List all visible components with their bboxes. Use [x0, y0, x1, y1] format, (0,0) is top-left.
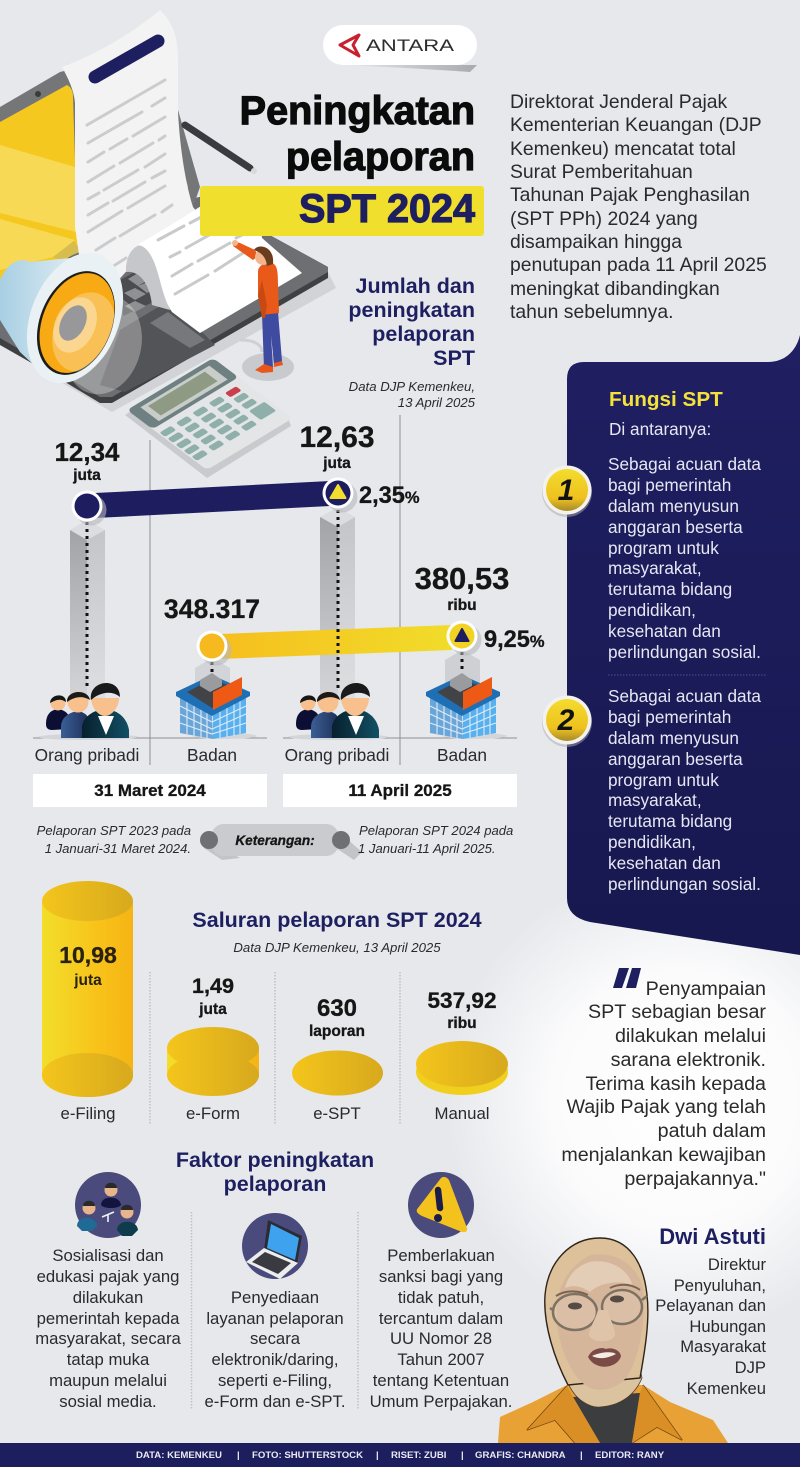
function 1 text: Sebagai acuan data: [608, 454, 761, 474]
intro text: Direktorat Jenderal Pajak: [510, 91, 728, 113]
speaker role: Kemenkeu: [687, 1379, 766, 1398]
axis labels: Orang pribadi: [35, 745, 139, 765]
speaker name: Dwi Astuti: [659, 1224, 766, 1249]
value: 380,53 ribu: 380,53: [415, 561, 509, 596]
paper: curled sheet: [126, 187, 302, 333]
growth: 2,35%: 2,35%: [359, 483, 420, 509]
legend note right: Pelaporan SPT 2024 pada: [359, 823, 513, 838]
value: 12,34 juta: [54, 437, 120, 484]
footer credits: |: [237, 1450, 240, 1461]
value: 12,63 juta: 12,63: [299, 421, 375, 454]
quote text: patuh dalam: [658, 1120, 766, 1142]
intro text: meningkat dibandingkan: [510, 278, 720, 300]
factor 1 text: pemerintah kepada: [37, 1309, 180, 1328]
growth: 9,25%: 9,25%: [484, 627, 545, 653]
quote text: dilakukan melalui: [615, 1025, 766, 1047]
speaker role: Pelayanan dan: [655, 1296, 766, 1315]
speaker role: Penyuluhan,: [674, 1276, 766, 1295]
function 1 text: dalam menyusun: [608, 496, 739, 516]
marker: badan 2024: [196, 630, 232, 666]
factor 2 text: [205, 1288, 345, 1411]
function 2 text: perlindungan sosial.: [608, 874, 761, 894]
heading: Saluran pelaporan SPT 2024: [192, 908, 482, 932]
dotted drop lines: [87, 510, 462, 690]
panel intro: Di antaranya:: [609, 419, 711, 439]
function 2 text: kesehatan dan: [608, 853, 721, 873]
value: 12,63 juta: juta: [322, 455, 351, 472]
value: 348.317: 348.317: [164, 594, 260, 624]
speaker role: [655, 1255, 766, 1398]
logo: ANTARA: [323, 25, 477, 72]
factor 3 text: tidak patuh,: [398, 1288, 484, 1307]
paper: long receipt: [62, 10, 205, 300]
factor 2 text: elektronik/daring,: [211, 1350, 339, 1369]
factor 3 text: sanksi bagi yang: [379, 1267, 503, 1286]
axis labels: Badan: [187, 745, 237, 765]
date box: 31 Maret 2024: [33, 774, 267, 807]
legend: Keterangan: Keterangan:: [235, 833, 315, 848]
intro text: Surat Pemberitahuan: [510, 161, 693, 183]
chart heading: Jumlah dan peningkatan: [348, 274, 475, 370]
axis labels: [35, 745, 487, 765]
quote text: menjalankan kewajiban: [561, 1144, 766, 1166]
factor 1 text: sosial media.: [59, 1392, 157, 1411]
function 1 text: bagi pemerintah: [608, 475, 731, 495]
chart heading: Jumlah dan peningkatan: pelaporan: [372, 322, 475, 346]
legend note left: [37, 823, 191, 856]
quote text: Penyampaian: [646, 978, 766, 1000]
footer credits: EDITOR: RANY: [595, 1450, 665, 1461]
cylinder: e-Filing: juta: [73, 972, 102, 989]
icon: warning: [408, 1172, 474, 1238]
intro text: tahun sebelumnya.: [510, 301, 673, 323]
panel heading: Fungsi SPT: [609, 388, 723, 411]
function 2 text: anggaran beserta: [608, 749, 743, 769]
intro text: disampaikan hingga: [510, 231, 682, 253]
icon: building 2024: [176, 673, 257, 739]
factor 1 text: maupun melalui: [49, 1371, 167, 1390]
factor 3 text: Tahun 2007: [397, 1350, 485, 1369]
quote text: sarana elektronik.: [611, 1049, 766, 1071]
legend note right: [358, 823, 513, 856]
function 2 text: terutama bidang: [608, 811, 732, 831]
marker: orang pribadi 2024: [72, 490, 106, 526]
function 1 text: perlindungan sosial.: [608, 642, 761, 662]
footer credits: GRAFIS: CHANDRA: [475, 1450, 566, 1461]
channel labels: e-Filing: [60, 1104, 116, 1123]
title highlight bar: [200, 186, 484, 236]
function 2 text: bagi pemerintah: [608, 707, 731, 727]
quote: [561, 968, 766, 1190]
channel labels: e-SPT: [313, 1104, 361, 1123]
factor 2 text: e-Form dan e-SPT.: [205, 1392, 345, 1411]
intro text: (SPT PPh) 2024 yang: [510, 208, 698, 230]
marker: badan 2025: [446, 620, 482, 656]
yellow connector bar: [220, 625, 452, 659]
footer credits: RISET: ZUBI: [391, 1450, 447, 1461]
factor 3 text: Pemberlakuan: [387, 1246, 495, 1265]
function 1 text: pendidikan,: [608, 600, 696, 620]
section: Faktor peningkatan: [35, 1148, 512, 1411]
cylinder: Manual: [416, 988, 508, 1095]
factor 1 text: dilakukan: [73, 1288, 143, 1307]
icon: people 2025: [288, 683, 388, 740]
intro text: Kemenkeu) mencatat total: [510, 138, 736, 160]
footer credits: |: [376, 1450, 379, 1461]
person: [232, 240, 294, 381]
function 2 text: masyarakat,: [608, 790, 702, 810]
function 2 text: pendidikan,: [608, 832, 696, 852]
footer credits: |: [461, 1450, 464, 1461]
function 2 text: [608, 686, 761, 894]
legend note right: 1 Januari-11 April 2025.: [358, 841, 496, 856]
heading: [176, 1148, 374, 1196]
function 1 text: anggaran beserta: [608, 517, 743, 537]
chart heading: Jumlah dan peningkatan: Jumlah dan: [356, 274, 475, 298]
factor 2 text: layanan pelaporan: [206, 1309, 344, 1328]
footer credits: DATA: KEMENKEU: [136, 1450, 222, 1461]
channel labels: Manual: [434, 1104, 490, 1123]
factor 1 text: edukasi pajak yang: [37, 1267, 179, 1286]
channel labels: e-Form: [186, 1104, 240, 1123]
channel labels: [60, 1104, 490, 1123]
function 1 text: terutama bidang: [608, 579, 732, 599]
chart heading: Jumlah dan peningkatan: SPT: [433, 346, 475, 370]
badge 1: 1: [558, 474, 574, 507]
factor 1 text: [35, 1246, 182, 1411]
function 1 text: kesehatan dan: [608, 621, 721, 641]
pillar: badan 2025: [445, 650, 480, 690]
quote text: SPT sebagian besar: [588, 1001, 766, 1023]
cylinder: e-Form: [167, 973, 259, 1096]
factor 1 text: Sosialisasi dan: [52, 1246, 164, 1265]
badge 2: 2: [557, 704, 575, 737]
panel: Fungsi SPT: [542, 335, 800, 955]
quote text: [561, 978, 766, 1190]
title: [200, 89, 484, 236]
footer credits: [0, 1443, 800, 1467]
factor 2 text: secara: [250, 1329, 301, 1348]
axis labels: Orang pribadi: [285, 745, 389, 765]
pillar: badan 2024: [195, 658, 230, 690]
cylinder: e-Filing: 10,98: [59, 942, 117, 968]
intro text: Tahunan Pajak Penghasilan: [510, 184, 750, 206]
value: 380,53 ribu: [415, 561, 509, 614]
cylinder: e-SPT: 630: [317, 995, 357, 1022]
speaker role: DJP: [735, 1358, 766, 1377]
factor 3 text: UU Nomor 28: [390, 1329, 492, 1348]
speaker role: Masyarakat: [680, 1337, 766, 1356]
icon: meeting: [75, 1172, 141, 1238]
title: pelaporan: [286, 135, 475, 179]
axis labels: Badan: [437, 745, 487, 765]
heading: pelaporan: [224, 1172, 326, 1196]
cylinder: Manual: ribu: [447, 1015, 477, 1032]
legend note left: Pelaporan SPT 2023 pada: [37, 823, 191, 838]
legend note left: 1 Januari-31 Maret 2024.: [45, 841, 191, 856]
megaphone: [0, 238, 153, 403]
heading: Faktor peningkatan: [176, 1148, 374, 1172]
function 2 text: dalam menyusun: [608, 728, 739, 748]
section: Saluran pelaporan: [42, 881, 508, 1125]
factor 3 text: [370, 1246, 512, 1411]
function 2 text: Sebagai acuan data: [608, 686, 761, 706]
laptop base: [0, 197, 336, 412]
factor 2 text: Penyediaan: [231, 1288, 319, 1307]
function 1 text: masyarakat,: [608, 558, 702, 578]
chart source note: 13 April 2025: [398, 395, 476, 410]
calculator: [125, 358, 293, 478]
speaker role: Hubungan: [689, 1317, 766, 1336]
value: 12,34 juta: 12,34: [54, 437, 120, 467]
cylinder: e-SPT: laporan: [309, 1023, 365, 1040]
factor 3 text: tentang Ketentuan: [373, 1371, 509, 1390]
icon: laptop: [242, 1213, 308, 1279]
cylinder: e-Filing: [42, 881, 133, 1097]
date box: 11 April 2025: [283, 774, 517, 807]
cylinder: e-Form: juta: [198, 1001, 227, 1018]
illustration: laptop, receipt, megaphone, person: [0, 10, 336, 412]
intro text: [510, 91, 767, 323]
cylinder: e-SPT: [292, 995, 383, 1096]
function 1 text: [608, 454, 761, 662]
footer credits: FOTO: SHUTTERSTOCK: [252, 1450, 363, 1461]
speaker role: Direktur: [708, 1255, 766, 1274]
icon: people 2024: [38, 683, 138, 740]
footer credits: |: [580, 1450, 583, 1461]
quote text: Wajib Pajak yang telah: [566, 1096, 766, 1118]
function 2 text: program untuk: [608, 770, 719, 790]
marker: orang pribadi 2025: [322, 478, 358, 512]
keyboard: [120, 260, 162, 316]
title: SPT 2024: [299, 187, 475, 231]
factor 1 text: tatap muka: [67, 1350, 150, 1369]
icon: quote mark: [613, 968, 641, 988]
date box: 11 April 2025: 11 April 2025: [348, 781, 452, 800]
factor 3 text: Umum Perpajakan.: [370, 1392, 512, 1411]
badge 2: [542, 696, 592, 747]
cylinder: Manual: 537,92: [427, 988, 497, 1013]
icon: building 2025: [426, 673, 507, 739]
quote glow: [445, 865, 800, 1335]
pillar: orang pribadi 2024: [70, 520, 105, 700]
chart heading: Jumlah dan peningkatan: peningkatan: [348, 298, 475, 322]
factor 3 text: tercantum dalam: [379, 1309, 503, 1328]
value: 12,34 juta: juta: [72, 467, 101, 484]
portrait: Dwi Astuti: [498, 1238, 728, 1443]
chart source note: [349, 379, 476, 410]
value: 12,63 juta: [299, 421, 375, 472]
title: Peningkatan: [240, 89, 475, 133]
factor 2 text: seperti e-Filing,: [218, 1371, 332, 1390]
legend: Keterangan: [37, 823, 513, 860]
chart source note: Data DJP Kemenkeu,: [349, 379, 475, 394]
quote text: perpajakannya.": [624, 1168, 766, 1190]
quote text: Terima kasih kepada: [585, 1073, 766, 1095]
laptop lid and screen: [0, 60, 200, 282]
date box: 31 Maret 2024: 31 Maret 2024: [94, 781, 206, 800]
intro text: Kementerian Keuangan (DJP: [510, 114, 762, 136]
pillar: orang pribadi 2025: [320, 507, 355, 700]
factor 1 text: masyarakat, secara: [35, 1329, 182, 1348]
pen: [185, 125, 257, 174]
navy connector bar: [95, 481, 330, 518]
badge 1: [542, 466, 592, 517]
chart: jumlah pelaporan: [33, 415, 545, 807]
logo: ANTARA: ANTARA: [366, 36, 455, 55]
function 1 text: program untuk: [608, 538, 719, 558]
source note: Data DJP Kemenkeu, 13 April 2025: [233, 940, 441, 955]
value: 380,53 ribu: ribu: [447, 597, 477, 614]
intro text: penutupan pada 11 April 2025: [510, 254, 767, 276]
cylinder: e-Form: 1,49: [192, 973, 234, 998]
